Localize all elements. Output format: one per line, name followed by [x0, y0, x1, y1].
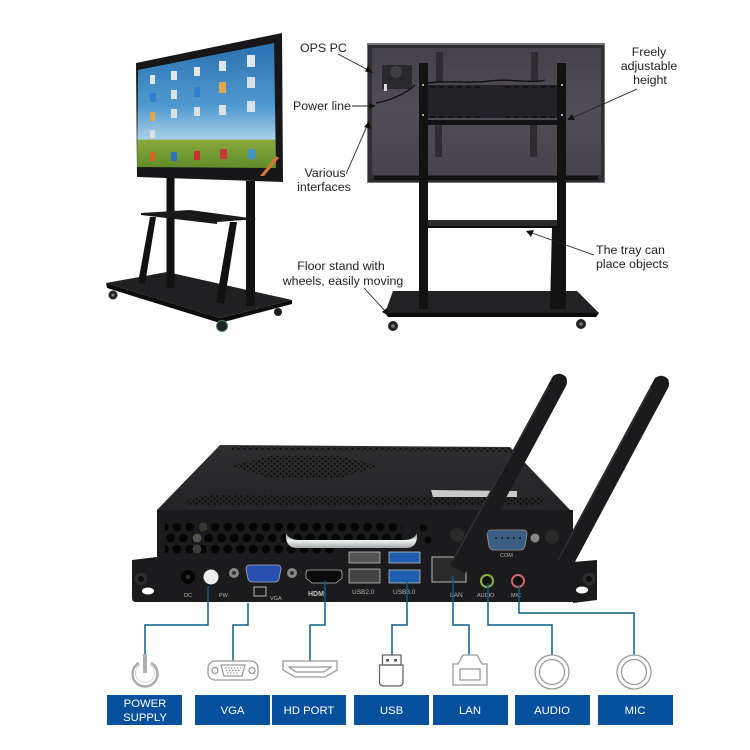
- USB 2.0 ports: [349, 552, 380, 596]
- callout: tray can place objects: [526, 230, 668, 271]
- DC jack: DC: [184, 593, 192, 599]
- callout: various interfaces: [297, 121, 371, 194]
- label: audio: [515, 695, 590, 725]
- stand posts and legs: [138, 176, 255, 306]
- USB 3.0 ports: [389, 552, 420, 596]
- LAN port: [432, 557, 466, 599]
- VGA port: [229, 565, 297, 602]
- label: mic: [598, 695, 673, 725]
- chrome handle: [286, 533, 417, 548]
- rear tray: [428, 220, 557, 228]
- callout: tray can place objects: The tray can: [596, 243, 665, 257]
- OPS flanges: [132, 557, 597, 603]
- USB 2.0 ports: USB2.0: [352, 589, 375, 596]
- callout: tray can place objects: place objects: [596, 257, 668, 271]
- callout: OPS PC: [300, 41, 373, 73]
- label: VGA: [195, 695, 270, 725]
- display screen: [137, 43, 276, 168]
- callout: floor stand with wheels: [282, 259, 403, 316]
- antenna right: [545, 376, 669, 573]
- label: LAN: LAN: [459, 705, 481, 717]
- callout: freely adjustable height: Freely: [632, 45, 667, 59]
- mic jack: [511, 575, 524, 599]
- callout: power line: Power line: [293, 99, 351, 113]
- mic jack: MIC: [511, 593, 521, 599]
- stand tray: [141, 210, 257, 224]
- power button: [204, 570, 229, 599]
- product: front view display on stand: [106, 33, 292, 332]
- icon: LAN: [453, 655, 487, 685]
- label: power supply: [107, 695, 182, 725]
- label: audio: AUDIO: [534, 705, 570, 717]
- label: LAN: [433, 695, 508, 725]
- product: rear view display on stand: [367, 43, 605, 331]
- label: USB: USB: [380, 705, 403, 717]
- COM port: [487, 530, 540, 559]
- DC jack: [181, 570, 195, 599]
- HDMI port: [306, 570, 342, 598]
- display frame: [136, 33, 283, 182]
- power button: PW: [219, 593, 229, 599]
- OPS front panel: [157, 510, 573, 602]
- rear base and wheels: [385, 291, 599, 331]
- VGA port: VGA: [270, 596, 282, 602]
- OPS top face with vents: [157, 445, 573, 513]
- rear display panel: [367, 43, 605, 183]
- icon: mic ring: [617, 655, 651, 689]
- product: OPS PC module: [132, 374, 669, 603]
- callout: freely adjustable height: [567, 45, 677, 120]
- label: VGA: VGA: [221, 705, 245, 717]
- icon: VGA: [208, 661, 258, 680]
- app icons: [150, 55, 279, 176]
- label: USB: [354, 695, 429, 725]
- label: HD port: [272, 695, 346, 725]
- icon: power: [132, 654, 158, 686]
- callout: floor stand with wheels: wheels, easily moving: [282, 274, 403, 288]
- COM port: COM: [500, 553, 513, 559]
- rear posts: [419, 63, 566, 309]
- label: HD port: HD PORT: [284, 705, 334, 717]
- mounting bracket and power line: [376, 80, 557, 125]
- callout: various interfaces: interfaces: [297, 180, 351, 194]
- icon: HDMI: [283, 661, 337, 677]
- USB 3.0 ports: USB3.0: [393, 589, 416, 596]
- LAN port: LAN: [450, 592, 463, 599]
- callout: freely adjustable height: adjustable: [621, 59, 677, 73]
- callout: OPS PC: OPS PC: [300, 41, 347, 55]
- audio jack: [477, 575, 495, 599]
- callout: floor stand with wheels: Floor stand with: [297, 259, 385, 273]
- icon: USB: [380, 655, 403, 686]
- antenna left: [450, 374, 567, 574]
- label: mic: MIC: [625, 705, 645, 717]
- label: power supply: POWER: [124, 698, 166, 710]
- connector wires: [145, 576, 634, 661]
- ventilation holes: [165, 521, 432, 555]
- icon: audio ring: [535, 655, 569, 689]
- stand base: [106, 272, 292, 332]
- callout: power line: [293, 99, 376, 113]
- HDMI port: HDMI: [308, 591, 326, 598]
- label: power supply: SUPPLY: [123, 712, 167, 724]
- audio jack: AUDIO: [477, 593, 495, 599]
- callout: various interfaces: Various: [304, 166, 346, 180]
- callout: freely adjustable height: height: [633, 73, 667, 87]
